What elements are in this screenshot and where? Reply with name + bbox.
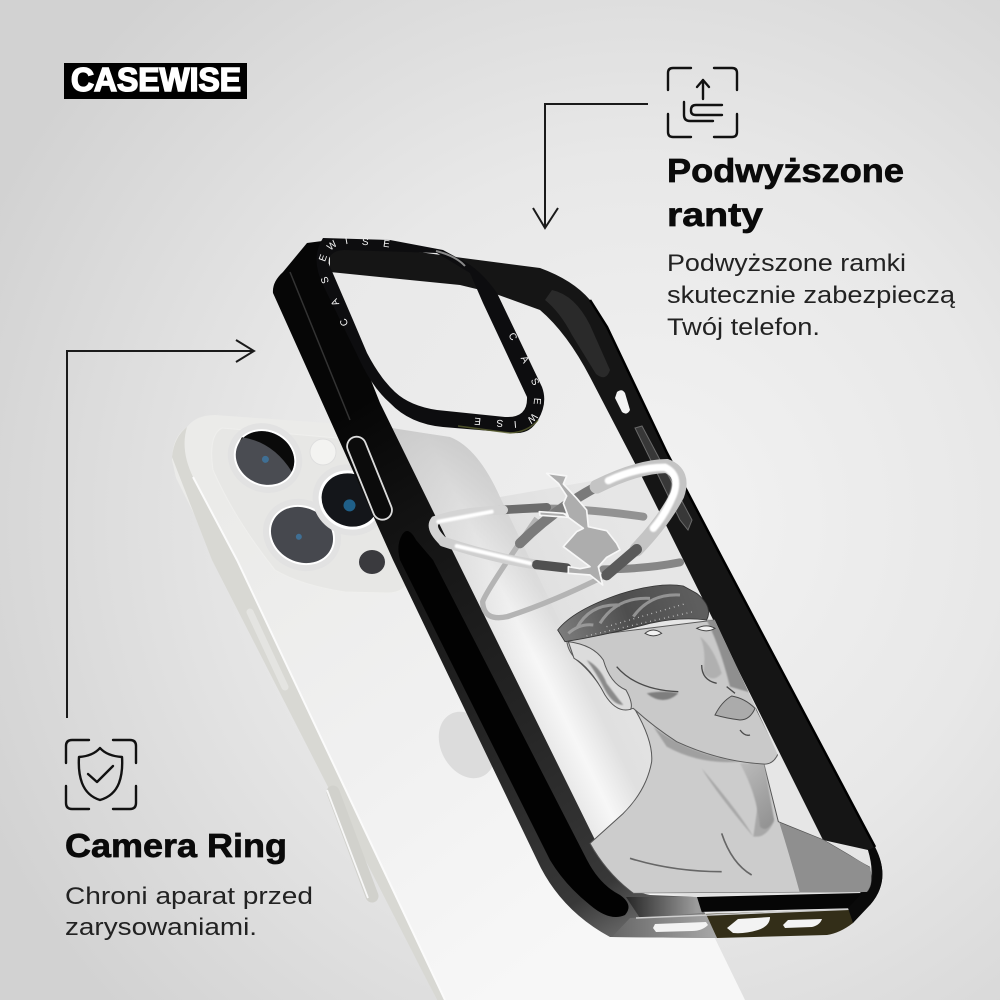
lens right [300, 452, 400, 548]
camera ring [316, 236, 544, 433]
description: raised edges [667, 250, 956, 341]
side buttons [250, 612, 285, 687]
ring body [316, 238, 544, 433]
phone back seen through the clear case [372, 425, 610, 725]
logo wordmark: CASEWISE [71, 61, 241, 98]
ear [568, 642, 631, 710]
black slot in left band [398, 531, 629, 917]
logo plate [64, 63, 247, 99]
ring highlight [436, 251, 465, 266]
description: camera ring [65, 883, 313, 941]
ring lettering: S [319, 275, 332, 285]
ring lettering: I [513, 418, 517, 429]
description: raised edges: skutecznie zabezpieczą [667, 282, 956, 309]
white phone [172, 410, 745, 1000]
case bottom transition [626, 897, 702, 918]
ring lettering: E [382, 239, 391, 250]
hair [558, 585, 709, 642]
translucent panel in corner [545, 290, 610, 377]
clear window of the case [300, 262, 868, 900]
left band ridge [290, 272, 350, 420]
description: raised edges: Podwyższone ramki [667, 250, 906, 277]
ring lettering: E [317, 253, 330, 263]
apple logo [428, 702, 506, 788]
eyes [645, 626, 715, 636]
volume button [344, 434, 395, 523]
side button slot [635, 426, 692, 530]
ring lettering [317, 236, 542, 429]
heading: raised edges [667, 152, 904, 233]
right band outer edge [590, 300, 875, 847]
facial shadows [647, 692, 678, 700]
ring lettering: W [325, 238, 340, 253]
ring lettering: S [496, 417, 504, 428]
side cutout [615, 390, 630, 414]
orbit ring tilted [520, 466, 680, 575]
lips [715, 696, 755, 720]
jaw shadow [653, 727, 740, 762]
charging port holes [653, 917, 822, 933]
phone case [273, 240, 882, 938]
facial lines [617, 665, 750, 735]
flying figure [539, 473, 620, 585]
neck shadow [702, 767, 774, 837]
clear area above the phone [320, 262, 655, 497]
case bottom olive edge [702, 909, 860, 938]
flash [310, 439, 336, 465]
heading: camera ring: Camera Ring [65, 827, 287, 864]
ring lettering: E [474, 415, 482, 426]
portrait bust [558, 585, 871, 893]
case bottom right corner [848, 847, 882, 923]
phone side edge [172, 427, 445, 1000]
microphone sensor [359, 550, 385, 574]
icon: raised edges [668, 68, 737, 137]
face [567, 620, 778, 764]
ring lettering: E [531, 397, 542, 405]
icon: shield with check [66, 740, 136, 809]
neck and shoulders [590, 707, 871, 893]
heading: raised edges: ranty [667, 196, 764, 233]
arrow: camera ring connector [67, 340, 254, 718]
heading: raised edges: Podwyższone [667, 152, 904, 189]
ring lettering: S [361, 237, 369, 248]
description: raised edges: Twój telefon. [667, 314, 820, 341]
camera plateau [212, 428, 420, 593]
phone body [172, 415, 745, 1000]
case bottom grey edge [612, 914, 717, 938]
ring lettering: A [329, 296, 342, 307]
ring lettering: A [518, 354, 531, 366]
ring lettering: C [338, 316, 351, 328]
right band of the case [330, 240, 882, 905]
ring lettering: S [528, 377, 541, 388]
left band of the case [273, 240, 717, 938]
logo: CASEWISE [64, 61, 247, 99]
description: camera ring: zarysowaniami. [65, 914, 257, 941]
printed artwork [433, 466, 871, 893]
orbit ring horizontal [433, 507, 680, 569]
case bottom black strip [697, 893, 873, 912]
shoulder shadow [779, 823, 871, 893]
orbit ring lower loop [483, 518, 607, 618]
lens bottom [250, 486, 354, 584]
lens top [216, 410, 314, 506]
description: camera ring: Chroni aparat przed [65, 883, 313, 910]
ring lettering: I [344, 236, 349, 247]
arrow: raised edges connector [533, 104, 648, 228]
ring lettering: C [506, 331, 519, 343]
ring lettering: W [524, 411, 539, 425]
